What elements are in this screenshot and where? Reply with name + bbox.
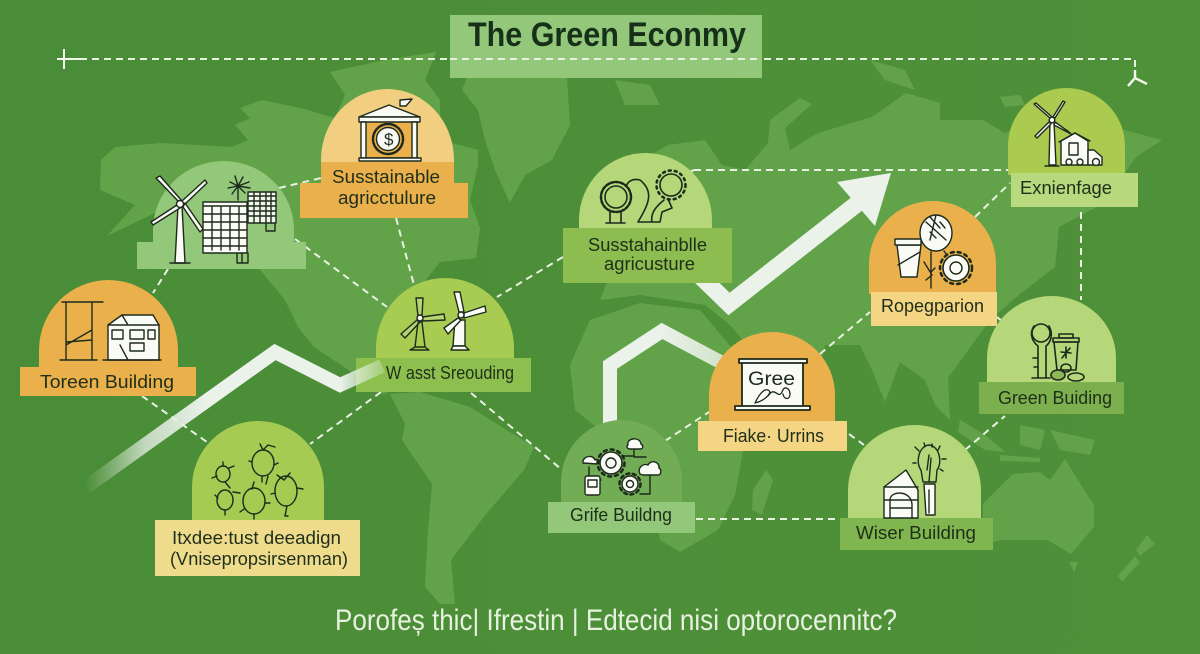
label background bbox=[871, 292, 997, 326]
label text line two: agricctulure bbox=[338, 187, 436, 208]
panel: ropegparion bbox=[869, 201, 997, 326]
label background bbox=[300, 162, 468, 218]
title: The Green Econmy bbox=[468, 16, 746, 54]
Tasmania and New Zealand bbox=[1069, 535, 1155, 582]
North America bbox=[100, 52, 480, 394]
icon: turbine, house and truck bbox=[1034, 101, 1102, 166]
icon: bank with coin gear bbox=[359, 99, 421, 161]
icon glyph: dollar: $ bbox=[384, 130, 394, 149]
label background bbox=[20, 367, 196, 396]
label background bbox=[840, 518, 993, 550]
top dashed frame bbox=[57, 49, 1147, 86]
dome bbox=[709, 332, 835, 423]
icon: wind turbine and solar panels bbox=[151, 176, 276, 263]
panel: fiake urrins bbox=[698, 332, 847, 451]
dome bbox=[39, 280, 178, 370]
panel: sustainable agriculture green bbox=[563, 153, 732, 283]
Australia bbox=[983, 459, 1094, 554]
icon: tool and waste bin bbox=[1031, 324, 1084, 381]
Eurasia bbox=[600, 93, 1162, 420]
panel: grife building bbox=[548, 420, 695, 533]
panel: green building right bbox=[979, 296, 1124, 414]
dome bbox=[376, 278, 514, 360]
icon: frame and building bbox=[60, 302, 161, 360]
dome bbox=[869, 201, 996, 294]
panel: bugs design bbox=[155, 421, 360, 576]
icon: house and light bulb bbox=[884, 443, 946, 518]
panel: solar and wind bbox=[137, 161, 306, 269]
dome bbox=[1008, 88, 1125, 175]
dome bbox=[137, 161, 306, 269]
footer tagline: Porofeș thic| Ifrestin | Edtecid nisi optorocennitc? bbox=[335, 604, 897, 637]
Indonesia bbox=[958, 420, 1095, 462]
dome bbox=[561, 420, 682, 505]
label text: Green Buiding bbox=[998, 387, 1112, 408]
label text: Susstainable bbox=[332, 166, 440, 187]
world map bbox=[100, 52, 1162, 604]
dome bbox=[848, 425, 981, 520]
icon: sign board bbox=[735, 359, 810, 410]
panel: toreen building bbox=[20, 280, 196, 396]
icon: gears, clouds and network bbox=[583, 439, 661, 495]
Africa bbox=[570, 303, 762, 552]
arrow: rising trend left bbox=[86, 352, 382, 487]
panel: wiser building bbox=[840, 425, 993, 550]
icon: cup, leaf and gear bbox=[895, 215, 972, 288]
label text line two: (Vnisepropsirsenman) bbox=[170, 548, 348, 569]
Greenland bbox=[462, 70, 570, 203]
label text: Grife Buildng bbox=[570, 504, 672, 525]
icon: two wind turbines bbox=[401, 292, 486, 350]
icon text: sign word: Gree bbox=[748, 369, 795, 390]
label text line one: Susstahainblle bbox=[588, 234, 707, 255]
panel: sustainable agriculture orange bbox=[300, 89, 468, 218]
label background bbox=[548, 502, 695, 533]
icon: gears and head bbox=[601, 170, 686, 223]
connector lines bbox=[142, 170, 1081, 519]
label background bbox=[155, 520, 360, 576]
dome bbox=[321, 89, 454, 165]
label background bbox=[563, 228, 732, 283]
dome bbox=[987, 296, 1116, 385]
label text: Toreen Building bbox=[40, 371, 174, 392]
label text: Fiake· Urrins bbox=[723, 425, 824, 446]
label background bbox=[1011, 173, 1138, 207]
dome bbox=[192, 421, 324, 522]
label background bbox=[979, 382, 1124, 414]
dome bbox=[579, 153, 712, 232]
Madagascar bbox=[752, 470, 773, 515]
label text: Exnienfage bbox=[1020, 177, 1112, 198]
label text: Ropegparion bbox=[881, 295, 984, 316]
label text: W asst Sreouding bbox=[386, 362, 514, 383]
label background bbox=[356, 358, 531, 392]
panel: exnienfage bbox=[1008, 88, 1138, 207]
panel: wasst sreouding bbox=[356, 278, 531, 392]
label text: Wiser Building bbox=[856, 522, 976, 543]
South America bbox=[390, 392, 534, 604]
icon: round seeds bbox=[212, 444, 303, 519]
label background bbox=[698, 421, 847, 451]
title bbox=[450, 15, 762, 78]
arrow: rising trend right bbox=[610, 173, 891, 425]
label text line two: agricusture bbox=[604, 253, 695, 274]
Arctic islands bbox=[615, 60, 1025, 107]
label text line one: Itxdee:tust deeadign bbox=[172, 527, 341, 548]
